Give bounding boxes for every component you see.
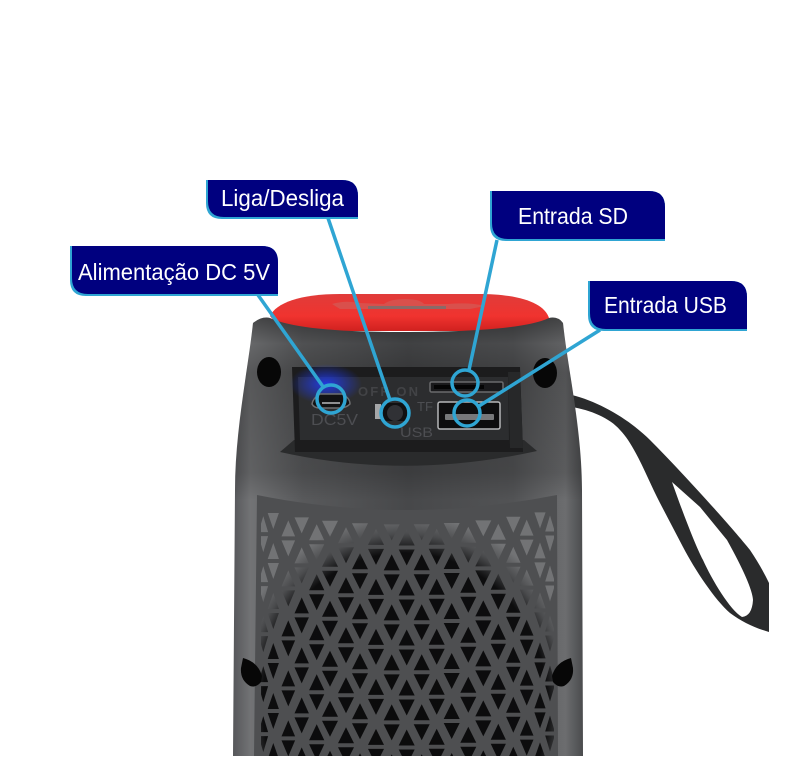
- marker: SD: [452, 370, 478, 396]
- marker: USB: [454, 400, 480, 426]
- callout: Liga/Desliga: Liga/Desliga: [221, 185, 344, 211]
- line: SD: [469, 240, 497, 370]
- label USB: USB: [400, 424, 433, 440]
- speaker grille: [254, 490, 560, 760]
- callout: Alimentação DC 5V: [70, 246, 278, 296]
- callout: Liga/Desliga: [206, 180, 358, 219]
- marker: DC 5V: [317, 385, 345, 413]
- left mounting hole: [257, 357, 281, 387]
- shoulder shading: [235, 318, 582, 500]
- line: USB: [479, 330, 600, 406]
- power switch: [375, 403, 407, 421]
- micro usb port: [312, 394, 350, 408]
- lower right side hole: [552, 658, 573, 686]
- infographic: speaker connections: [70, 180, 769, 756]
- speaker: [233, 294, 583, 760]
- label DC5V: DC5V: [311, 412, 358, 429]
- line: DC 5V: [258, 295, 324, 388]
- USB port: [438, 402, 500, 429]
- callout: Alimentação DC 5V: Alimentação DC 5V: [78, 259, 271, 285]
- marker: on/off: [381, 399, 409, 427]
- port panel: [280, 364, 537, 466]
- label OFF ON: OFF ON: [358, 384, 418, 399]
- speaker body: [233, 318, 583, 756]
- SD card slot: [430, 382, 503, 392]
- red top lid: [270, 294, 549, 331]
- right mounting hole: [533, 358, 557, 388]
- callout: Entrada USB: Entrada USB: [604, 292, 727, 318]
- blue led glow: [290, 364, 362, 404]
- leader lines and port markers: [258, 218, 600, 427]
- line: on/off: [328, 218, 390, 400]
- callout: Entrada SD: Entrada SD: [518, 203, 628, 229]
- lower left side hole: [241, 658, 262, 686]
- label TF: TF: [417, 399, 433, 414]
- callout: Entrada USB: [588, 281, 747, 331]
- callout: Entrada SD: [490, 191, 665, 241]
- strap loop: [572, 395, 769, 632]
